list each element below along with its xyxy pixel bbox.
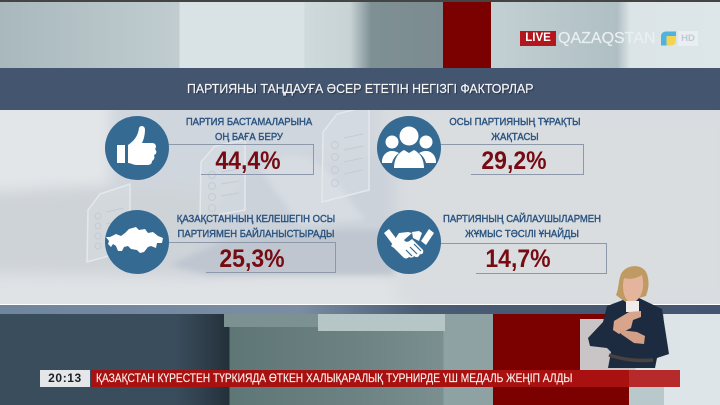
item: stable supporter [377, 116, 584, 180]
jacket [588, 298, 669, 368]
icon: logo mark [661, 32, 676, 46]
pale ledge [224, 314, 318, 327]
value box bottom line [476, 273, 607, 274]
value: 29,2% [481, 147, 547, 175]
item: party initiatives [105, 116, 314, 180]
value: 14,7% [485, 245, 551, 273]
value: 44,4% [215, 147, 281, 175]
label: ЖАҚТАСЫ [491, 132, 539, 142]
light window [580, 319, 680, 370]
value box bottom line [471, 174, 584, 175]
title bar: ПАРТИЯНЫ ТАҢДАУҒА ӘСЕР ЕТЕТІН НЕГІЗГІ ФАКТОРЛАР [187, 81, 533, 96]
label: ОСЫ ПАРТИЯНЫҢ ТҰРАҚТЫ [449, 117, 581, 128]
news ticker: ҚАЗАҚСТАН КҮРЕСТЕН ТҮРКИЯДА ӨТКЕН ХАЛЫҚАРАЛЫҚ ТУРНИРДЕ ҮШ МЕДАЛЬ ЖЕҢІП АЛДЫ [96, 372, 572, 385]
hd badge: HD [681, 33, 695, 44]
value box [165, 242, 336, 273]
pale ledge highlight [318, 314, 445, 331]
item: working style with voters [377, 210, 607, 274]
document outlines [87, 106, 369, 262]
blouse [626, 301, 639, 312]
value box [437, 243, 607, 274]
clock [40, 370, 90, 387]
icon: handshake [377, 210, 441, 274]
title bar [0, 68, 720, 110]
icon: people [377, 116, 441, 180]
background: laptop and documents illustration [0, 110, 395, 276]
channel name: QAZAQSTAN [558, 30, 656, 47]
background: main panel [0, 110, 720, 305]
label: ПАРТИЯ БАСТАМАЛАРЫНА [186, 117, 312, 128]
icon: thumbs up [105, 116, 169, 180]
value box [165, 144, 314, 175]
value: 25,3% [219, 245, 285, 273]
icon: map of Kazakhstan [105, 210, 169, 274]
value box bottom line [206, 272, 336, 273]
label [443, 212, 601, 240]
value box bottom line [201, 174, 314, 175]
belt [609, 355, 653, 360]
value box [437, 144, 584, 175]
label [449, 117, 581, 142]
clock: 20:13 [48, 371, 82, 385]
pointing hand [613, 311, 641, 334]
lower band strip [0, 304, 720, 314]
label: ПАРТИЯМЕН БАЙЛАНЫСТЫРАДЫ [178, 228, 334, 240]
label: ЖҰМЫС ТӘСІЛІ ҰНАЙДЫ [465, 228, 579, 240]
face [623, 275, 643, 302]
sign language interpreter [588, 266, 669, 368]
news ticker [91, 370, 680, 387]
label [186, 117, 312, 142]
item: future of Kazakhstan [105, 210, 336, 274]
label: ҚАЗАҚСТАННЫҢ КЕЛЕШЕГІН ОСЫ [177, 214, 335, 225]
background: lower studio [0, 304, 720, 405]
channel logo [520, 30, 698, 47]
hd badge [678, 31, 698, 46]
label: ПАРТИЯНЫҢ САЙЛАУШЫЛАРМЕН [443, 214, 601, 225]
live badge: LIVE [525, 32, 551, 44]
label [177, 214, 335, 240]
live badge [520, 31, 556, 46]
background: top studio band [0, 0, 720, 68]
label: ОҢ БАҒА БЕРУ [215, 132, 283, 142]
lower hand [620, 330, 645, 344]
hair [616, 266, 649, 302]
